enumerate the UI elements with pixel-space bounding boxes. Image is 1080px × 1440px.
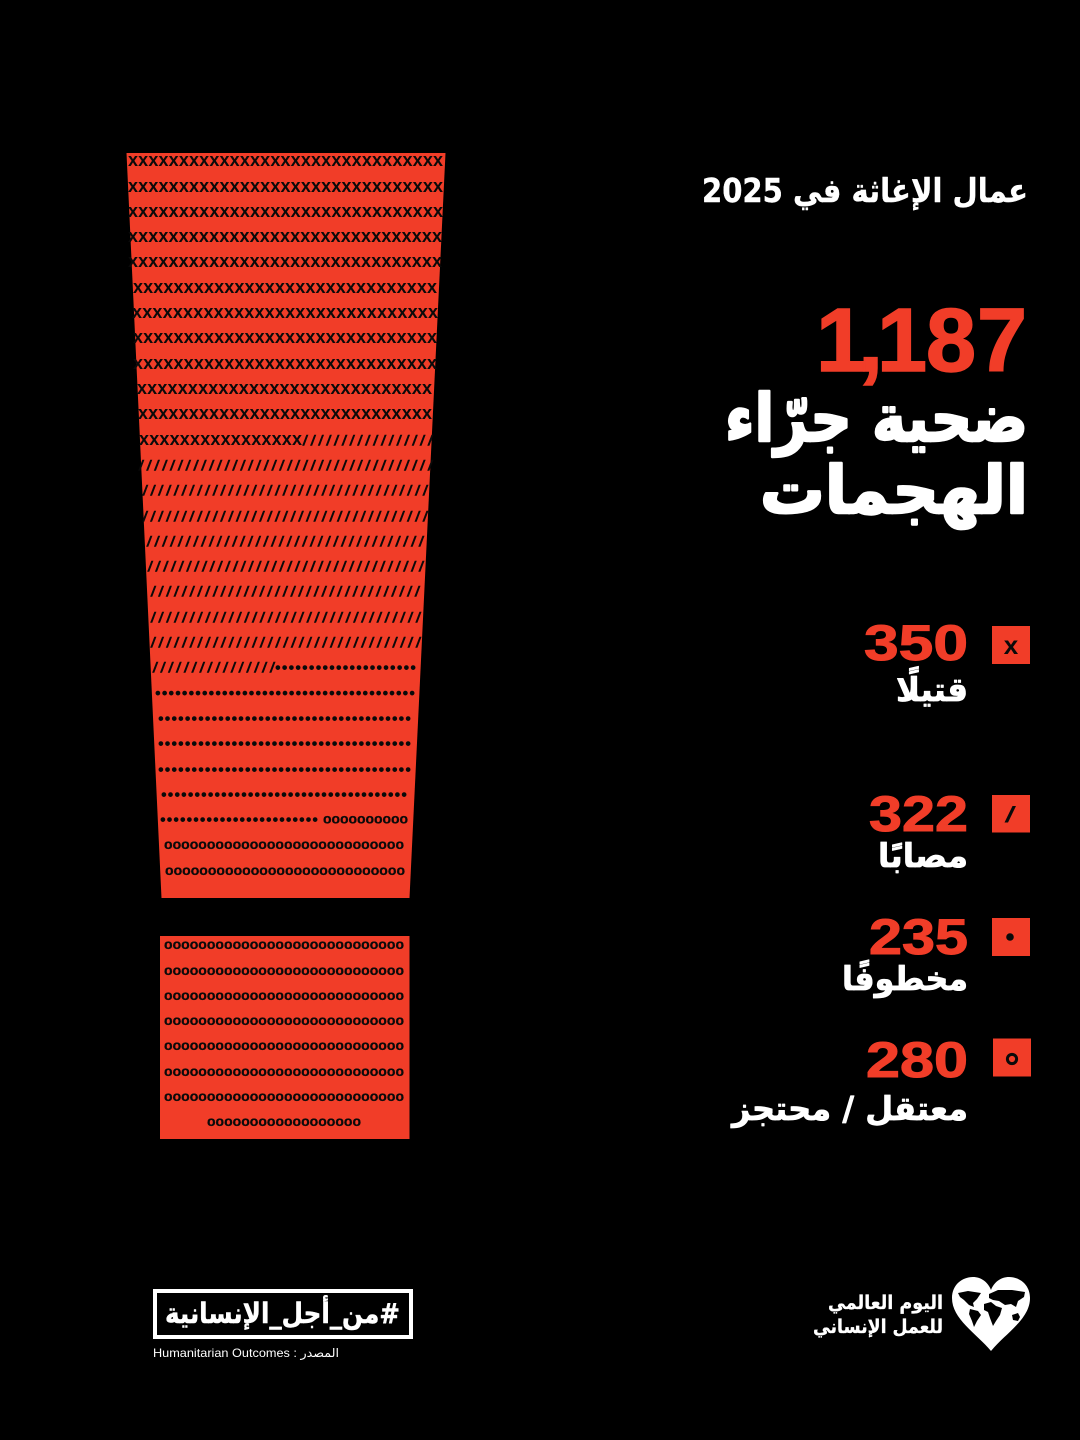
rows of solid dots: kidnapped: •••••••••••••••••••••••••••••••••••••• <box>158 710 411 728</box>
legend: injured <box>869 786 1030 875</box>
legend: kidnapped <box>842 909 1030 999</box>
rows of hollow circles: detained: oooooooooo <box>323 810 408 826</box>
icon: heart with world map <box>952 1277 1030 1351</box>
rows of x marks: killed: xxxxxxxxxxxxxxxxxxxxxxxxxxxxxxx <box>128 251 442 271</box>
rows of slash marks: injured: ////////////////////////////////////// <box>138 457 434 473</box>
rows of hollow circles: detained: oooooooooooooooooooooooooooo <box>164 1012 404 1028</box>
logo text line 2: للعمل الإنساني <box>813 1316 943 1338</box>
killed label: قتيلًا <box>896 666 968 709</box>
detained label: معتقل / محتجز <box>730 1089 968 1129</box>
rows of hollow circles: detained: oooooooooooooooooooooooooooo <box>165 862 405 878</box>
exclamation mark chart <box>126 150 446 1139</box>
rows of solid dots: kidnapped: •••••••••••••••••••••••••••••••••••••• <box>158 735 411 753</box>
logo: world humanitarian day <box>813 1277 1030 1351</box>
headline <box>725 380 1028 530</box>
hashtag box <box>155 1291 411 1337</box>
rows of solid dots: kidnapped: •••••••••••••••••••••••••••••••••••••• <box>158 761 411 779</box>
rows of x marks: killed: xxxxxxxxxxxxxxxxxxxxxxxxxxxxx <box>137 378 432 398</box>
exclamation bar <box>126 153 446 898</box>
headline line 1: ضحية جرّاء <box>725 380 1028 457</box>
rows of solid dots: kidnapped: •••••••••••••••••••••••• <box>160 811 318 829</box>
rows of x marks: killed: xxxxxxxxxxxxxxxxxxxxxxxxxxxxxxx <box>128 150 443 170</box>
headline line 2: الهجمات <box>760 452 1028 530</box>
total number: 1,187 <box>816 291 1027 391</box>
rows of slash marks: injured: //////////////////////////////////// <box>146 533 425 549</box>
exclamation dot <box>160 936 410 1139</box>
rows of solid dots: kidnapped: ••••••••••••••••••••• <box>275 659 416 677</box>
rows of x marks: killed: xxxxxxxxxxxxxxxxxxxxxxxxxxxxxxx <box>128 201 443 221</box>
legend: killed <box>864 615 1030 709</box>
rows of x marks: killed: xxxxxxxxxxxxxxxxxxxxxxxxxxxxx <box>138 403 432 423</box>
rows of hollow circles: detained: oooooooooooooooooooooooooooo <box>164 1063 404 1079</box>
rows of solid dots: kidnapped: ••••••••••••••••••••••••••••••••••••••• <box>155 684 415 702</box>
rows of slash marks: injured: ///////////////////////////////////// <box>142 482 429 498</box>
rows of hollow circles: detained: oooooooooooooooooooooooooooo <box>164 962 404 978</box>
detained count: 280 <box>866 1032 968 1088</box>
rows of slash marks: injured: //////////////////////////////////// <box>147 558 425 574</box>
rows of slash marks: injured: /////////////////////////////////// <box>150 634 422 650</box>
rows of hollow circles: detained: oooooooooooooooooooooooooooo <box>164 936 404 952</box>
rows of x marks: killed: xxxxxxxxxxxxxxxx <box>139 429 302 449</box>
icon: slash marker <box>992 795 1030 832</box>
rows of hollow circles: detained <box>164 810 408 1129</box>
kidnapped label: مخطوفًا <box>842 959 968 999</box>
rows of slash marks: injured: /////////////////////////////////// <box>150 583 421 599</box>
rows of x marks: killed: xxxxxxxxxxxxxxxxxxxxxxxxxxxxxx <box>132 302 438 322</box>
title: عمال الإغاثة في 2025 <box>702 171 1028 210</box>
rows of hollow circles: detained: oooooooooooooooooooooooooooo <box>164 836 404 852</box>
rows of hollow circles: detained: oooooooooooooooooooooooooooo <box>164 987 404 1003</box>
icon: x marker <box>992 626 1030 664</box>
rows of x marks: killed <box>128 150 443 449</box>
legend: detained <box>730 1032 1031 1129</box>
rows of hollow circles: detained: oooooooooooooooooooooooooooo <box>164 1088 404 1104</box>
icon: dot marker <box>992 918 1030 956</box>
injured label: مصابًا <box>878 836 968 875</box>
rows of x marks: killed: xxxxxxxxxxxxxxxxxxxxxxxxxxxxxx <box>133 353 437 373</box>
rows of x marks: killed: xxxxxxxxxxxxxxxxxxxxxxxxxxxxxx <box>133 277 437 297</box>
rows of hollow circles: detained: oooooooooooooooooo <box>207 1113 361 1129</box>
rows of x marks: killed: xxxxxxxxxxxxxxxxxxxxxxxxxxxxxxx <box>128 226 442 246</box>
rows of slash marks: injured <box>138 432 434 675</box>
rows of slash marks: injured: //////////////// <box>152 659 276 675</box>
kidnapped count: 235 <box>869 909 968 965</box>
rows of slash marks: injured: ///////////////// <box>302 432 434 448</box>
rows of solid dots: kidnapped: ••••••••••••••••••••••••••••••••••••• <box>161 786 407 804</box>
icon: circle marker <box>993 1038 1031 1076</box>
injured count: 322 <box>869 786 968 842</box>
rows of slash marks: injured: /////////////////////////////////// <box>150 609 422 625</box>
icon: x marker: x <box>1004 630 1019 660</box>
rows of solid dots: kidnapped <box>155 659 416 829</box>
logo text line 1: اليوم العالمي <box>828 1292 943 1314</box>
rows of slash marks: injured: ///////////////////////////////////// <box>142 508 429 524</box>
source line: Humanitarian Outcomes : المصدر <box>153 1346 339 1361</box>
rows of x marks: killed: xxxxxxxxxxxxxxxxxxxxxxxxxxxxxxx <box>128 176 443 196</box>
killed count: 350 <box>864 615 968 671</box>
hashtag box: ‏#من_أجل_الإنسانية <box>165 1295 400 1330</box>
rows of hollow circles: detained: oooooooooooooooooooooooooooo <box>164 1037 404 1053</box>
rows of x marks: killed: xxxxxxxxxxxxxxxxxxxxxxxxxxxxxx <box>133 327 437 347</box>
